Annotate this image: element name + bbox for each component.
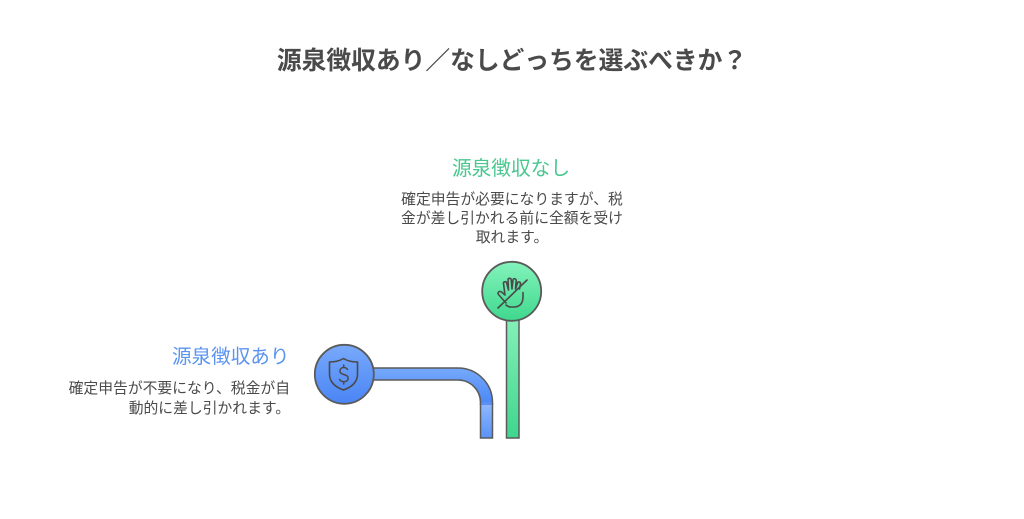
text block: without withholding: 取れます。 — [476, 230, 548, 246]
text block: without withholding: 金が差し引かれる前に全額を受け — [401, 211, 623, 227]
text block: with withholding — [69, 380, 290, 416]
title: 源泉徴収あり／なしどっちを選ぶべきか？ — [277, 48, 747, 75]
heading: with withholding: 源泉徴収あり — [172, 346, 290, 368]
text block: without withholding: 確定申告が必要になりますが、税 — [401, 192, 623, 208]
icon: blue circle with dollar shield — [315, 345, 374, 404]
icon: green circle with crossed-out hand — [482, 262, 541, 321]
text block: with withholding: 確定申告が不要になり、税金が自 — [69, 381, 290, 397]
heading: without withholding: 源泉徴収なし — [452, 158, 570, 180]
text block: without withholding — [401, 191, 623, 246]
bar: blue elbow — [370, 368, 492, 438]
bar: green vertical — [506, 318, 519, 438]
text block: with withholding: 動的に差し引かれます。 — [129, 400, 290, 416]
